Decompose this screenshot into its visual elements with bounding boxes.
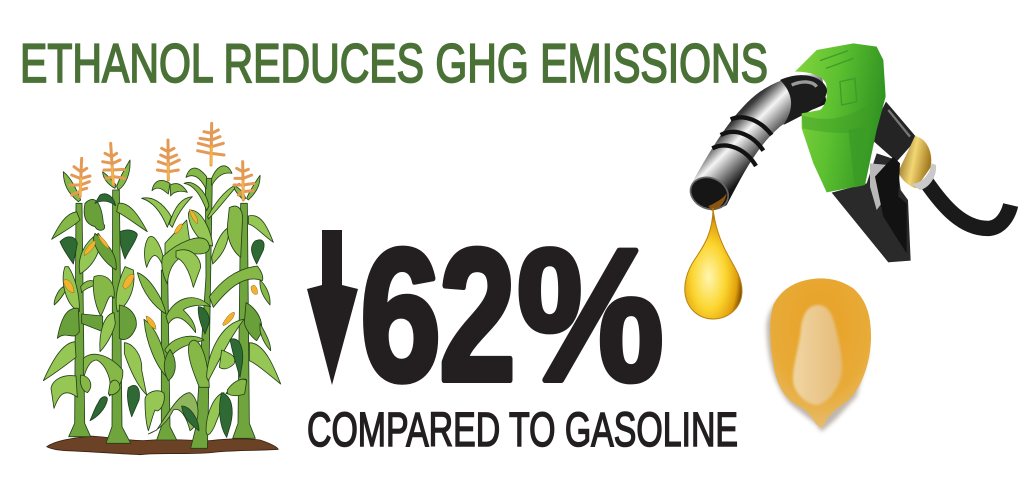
corn ears	[63, 209, 257, 329]
subheading: COMPARED TO GASOLINE	[307, 404, 738, 457]
number 62%: %	[517, 210, 664, 420]
icon: down arrow	[307, 230, 358, 385]
nozzle spout	[690, 74, 827, 208]
title: ETHANOL REDUCES GHG EMISSIONS	[20, 32, 768, 94]
kernel germ	[793, 305, 842, 405]
hose collar	[868, 102, 917, 162]
green body	[795, 43, 886, 192]
number 62%: 2	[439, 210, 516, 420]
gold ferrule	[898, 136, 931, 188]
nozzle opening	[686, 172, 733, 215]
leaves mid	[43, 160, 281, 435]
number 62%	[360, 210, 664, 420]
trigger handle	[832, 153, 911, 262]
hose	[925, 180, 1011, 228]
icon: corn kernel	[767, 278, 871, 432]
soil	[47, 436, 278, 455]
icon: fuel drop	[685, 208, 742, 319]
icon: fuel pump nozzle	[686, 43, 1011, 262]
big number: down arrow and 62%	[307, 210, 664, 420]
stalks	[69, 178, 255, 448]
number 62%: 6	[360, 210, 441, 420]
leaves dark	[60, 194, 264, 437]
kernel body	[770, 278, 871, 427]
illustration: corn stalks	[43, 123, 281, 455]
kernel shadow	[767, 285, 868, 432]
tassels	[70, 123, 254, 200]
